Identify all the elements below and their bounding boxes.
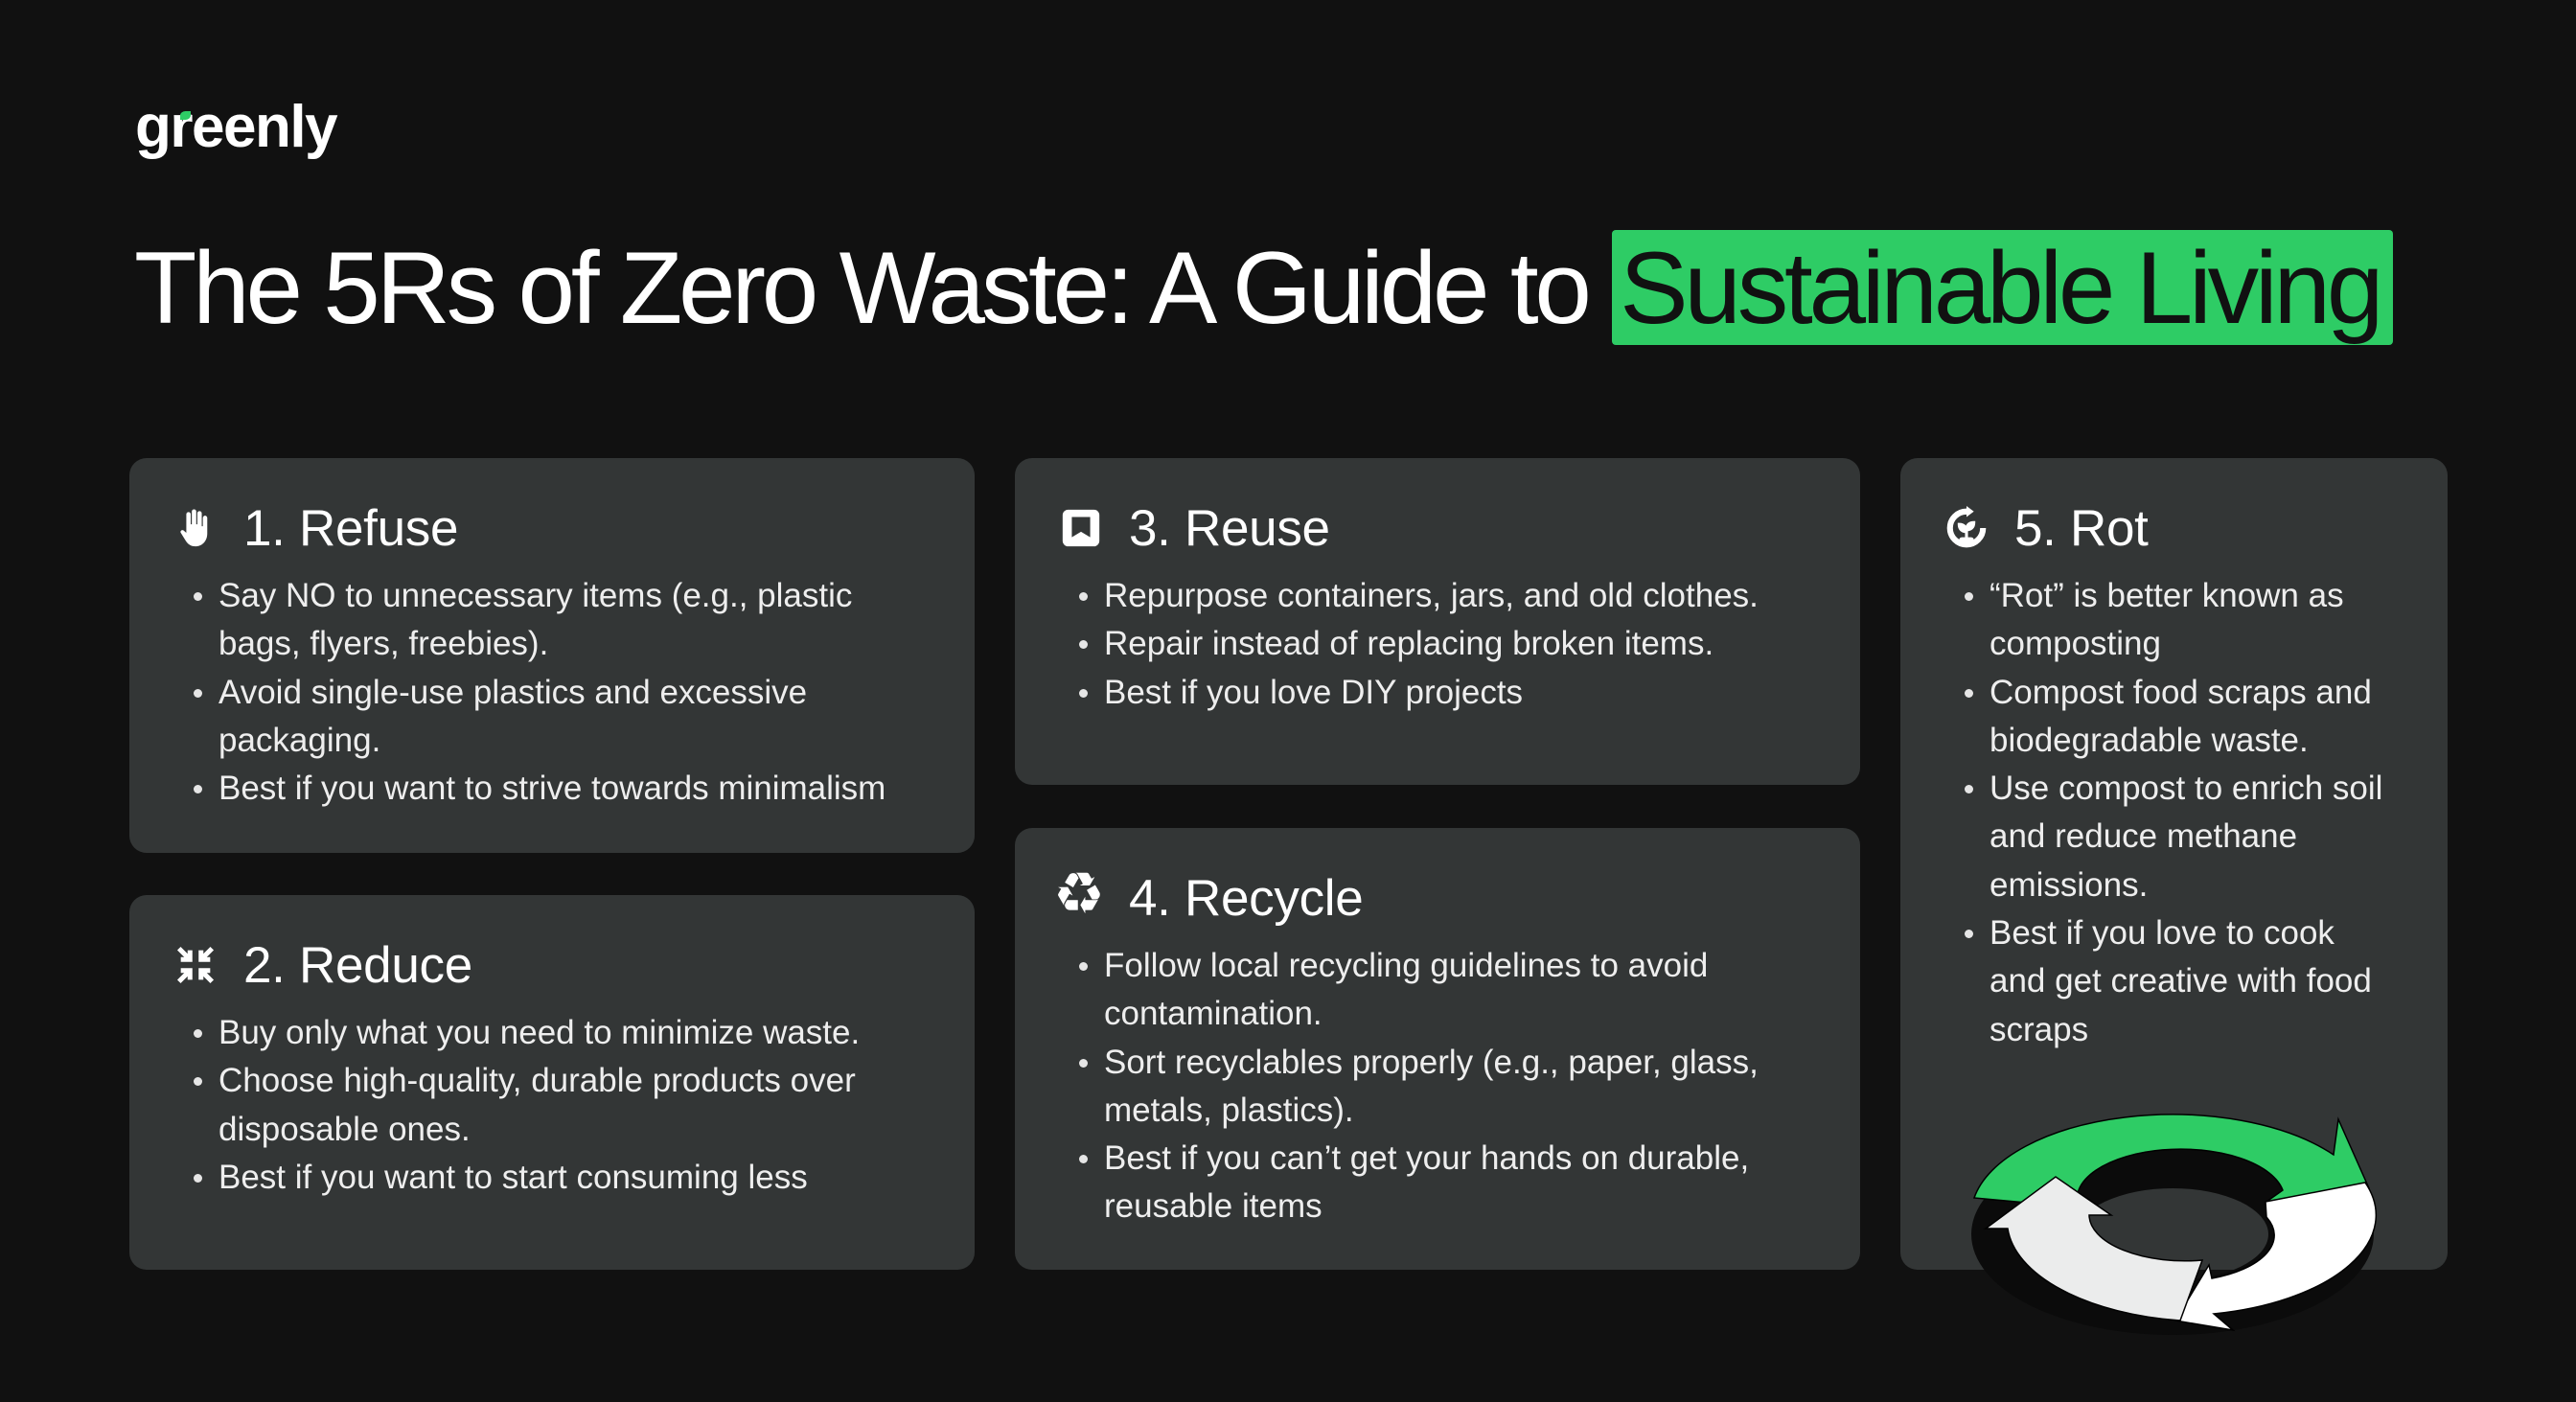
panel: recycle: 4. Recycle [1129, 870, 1363, 927]
bullets: recycle: reusable items [1104, 1187, 1322, 1225]
bullets: reduce: disposable ones. [218, 1111, 471, 1148]
bullets: recycle: Follow local recycling guidelines to avoid [1104, 947, 1708, 984]
bullets: reduce [194, 1014, 860, 1196]
panel: refuse: 1. Refuse [243, 500, 458, 557]
bullets: rot: emissions. [1990, 866, 2148, 904]
panel: recycle [1015, 828, 1860, 1270]
grey arrow [1986, 1177, 2202, 1321]
bullets: reuse: Repurpose containers, jars, and old clothes. [1104, 577, 1759, 614]
bullets: recycle: Best if you can’t get your hands on durable, [1104, 1139, 1749, 1177]
title: The 5Rs of Zero Waste: A Guide to [134, 230, 1588, 345]
bullets: rot: and get creative with food [1990, 962, 2372, 1000]
bullets: refuse: bags, flyers, freebies). [218, 625, 548, 662]
illustration: cycle arrows [1971, 1114, 2377, 1331]
bullets: reuse: Repair instead of replacing broken items. [1104, 625, 1714, 662]
icon: recycle: ♻ [1053, 862, 1105, 926]
bullets: reduce: Best if you want to start consuming less [218, 1159, 808, 1196]
bullets: reduce: Choose high-quality, durable products over [218, 1062, 856, 1099]
title: Sustainable Living [1620, 230, 2380, 345]
bullets: rot: and reduce methane [1990, 817, 2297, 855]
panel: reuse: 3. Reuse [1129, 500, 1330, 557]
bullets: recycle: contamination. [1104, 995, 1322, 1032]
panel: reduce [129, 895, 975, 1270]
bullets: rot: Best if you love to cook [1990, 914, 2334, 952]
bullets: refuse [194, 577, 886, 807]
panel: rot [1900, 458, 2448, 1270]
bullets: rot [1965, 577, 2382, 1048]
icon: compost [1947, 506, 1986, 548]
logo: greenly [135, 94, 336, 160]
bullets: refuse: Best if you want to strive towards minimalism [218, 770, 886, 807]
bullets: recycle [1079, 947, 1759, 1225]
bullets: rot: Use compost to enrich soil [1990, 770, 2382, 807]
bullets: rot: biodegradable waste. [1990, 722, 2309, 759]
bullets: rot: composting [1990, 625, 2161, 662]
bullets: reuse: Best if you love DIY projects [1104, 674, 1523, 711]
icon: box [1062, 510, 1100, 546]
bullets: refuse: packaging. [218, 722, 380, 759]
bullets: rot: “Rot” is better known as [1990, 577, 2344, 614]
bullets: reduce: Buy only what you need to minimize waste. [218, 1014, 860, 1051]
bullets: rot: scraps [1990, 1011, 2088, 1048]
panel: reuse [1015, 458, 1860, 785]
bullets: refuse: Avoid single-use plastics and excessive [218, 674, 807, 711]
white arrow [2175, 1183, 2376, 1330]
green arrow [1974, 1115, 2369, 1207]
bullets: recycle: Sort recyclables properly (e.g., paper, glass, [1104, 1044, 1759, 1081]
panel: reduce: 2. Reduce [243, 937, 472, 994]
bullets: recycle: metals, plastics). [1104, 1092, 1354, 1129]
title [134, 230, 2393, 345]
bullets: reuse [1079, 577, 1759, 711]
bullets: refuse: Say NO to unnecessary items (e.g., plastic [218, 577, 852, 614]
bullets: rot: Compost food scraps and [1990, 674, 2372, 711]
panel: refuse [129, 458, 975, 853]
icon: hand [180, 510, 207, 546]
panel: rot: 5. Rot [2014, 500, 2149, 557]
icon: compress arrows [177, 947, 214, 983]
